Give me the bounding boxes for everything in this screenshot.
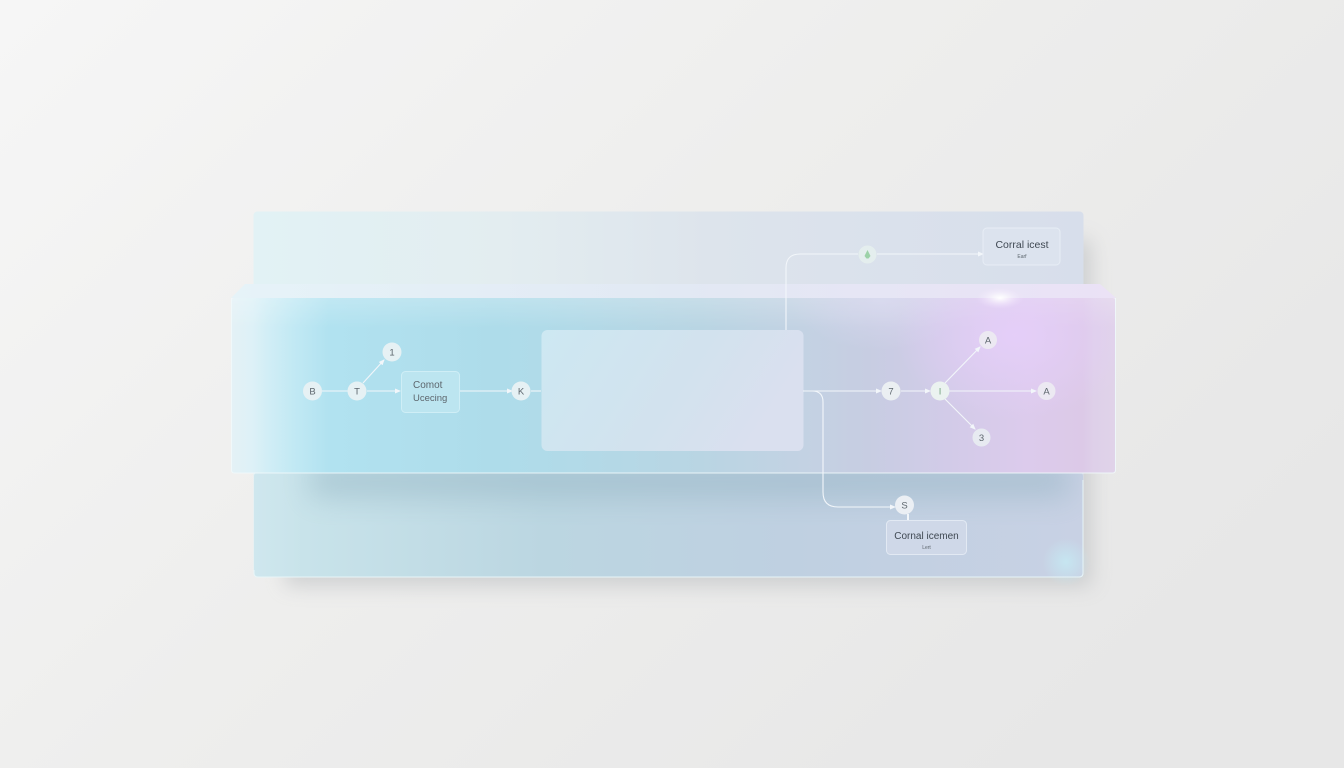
node: 1: 1: [389, 348, 395, 358]
node: 7: [882, 382, 900, 400]
card: top right label: [983, 228, 1060, 265]
card: left label: Comot: [413, 380, 443, 391]
node: K: K: [518, 386, 525, 398]
node: l green: [930, 382, 950, 400]
node: 7: 7: [888, 386, 894, 398]
node: 3: [972, 428, 990, 446]
node: green top: [858, 246, 876, 264]
card: bottom right label: Lert: [922, 545, 931, 551]
node: 3: 3: [979, 433, 984, 444]
node: B: [303, 382, 322, 400]
card: left label: [402, 372, 460, 412]
node: A: A: [985, 336, 992, 346]
node: T: [348, 382, 366, 400]
node: K: [512, 382, 530, 400]
node: S: [895, 496, 914, 514]
card: left label: Ucecing: [413, 393, 447, 404]
panel: front glass band: [231, 284, 1116, 474]
card: bottom right label: [886, 520, 966, 554]
node: icon right: [1038, 382, 1056, 400]
node: A: [979, 331, 997, 349]
node: 1: [382, 342, 402, 362]
card: top right label: Earf: [1017, 254, 1027, 260]
card: top right label: Corral icest: [995, 239, 1049, 251]
panel: center glass box: [542, 330, 804, 451]
node: S: S: [901, 500, 908, 512]
node: icon right: A: [1043, 386, 1050, 398]
card: bottom right label: Cornal icemen: [894, 531, 959, 542]
node: T: T: [354, 386, 360, 398]
panel: back glass panel: [254, 212, 1091, 586]
connectors: [322, 254, 1036, 520]
node: B: B: [309, 386, 316, 398]
node: l green: l: [939, 386, 941, 398]
